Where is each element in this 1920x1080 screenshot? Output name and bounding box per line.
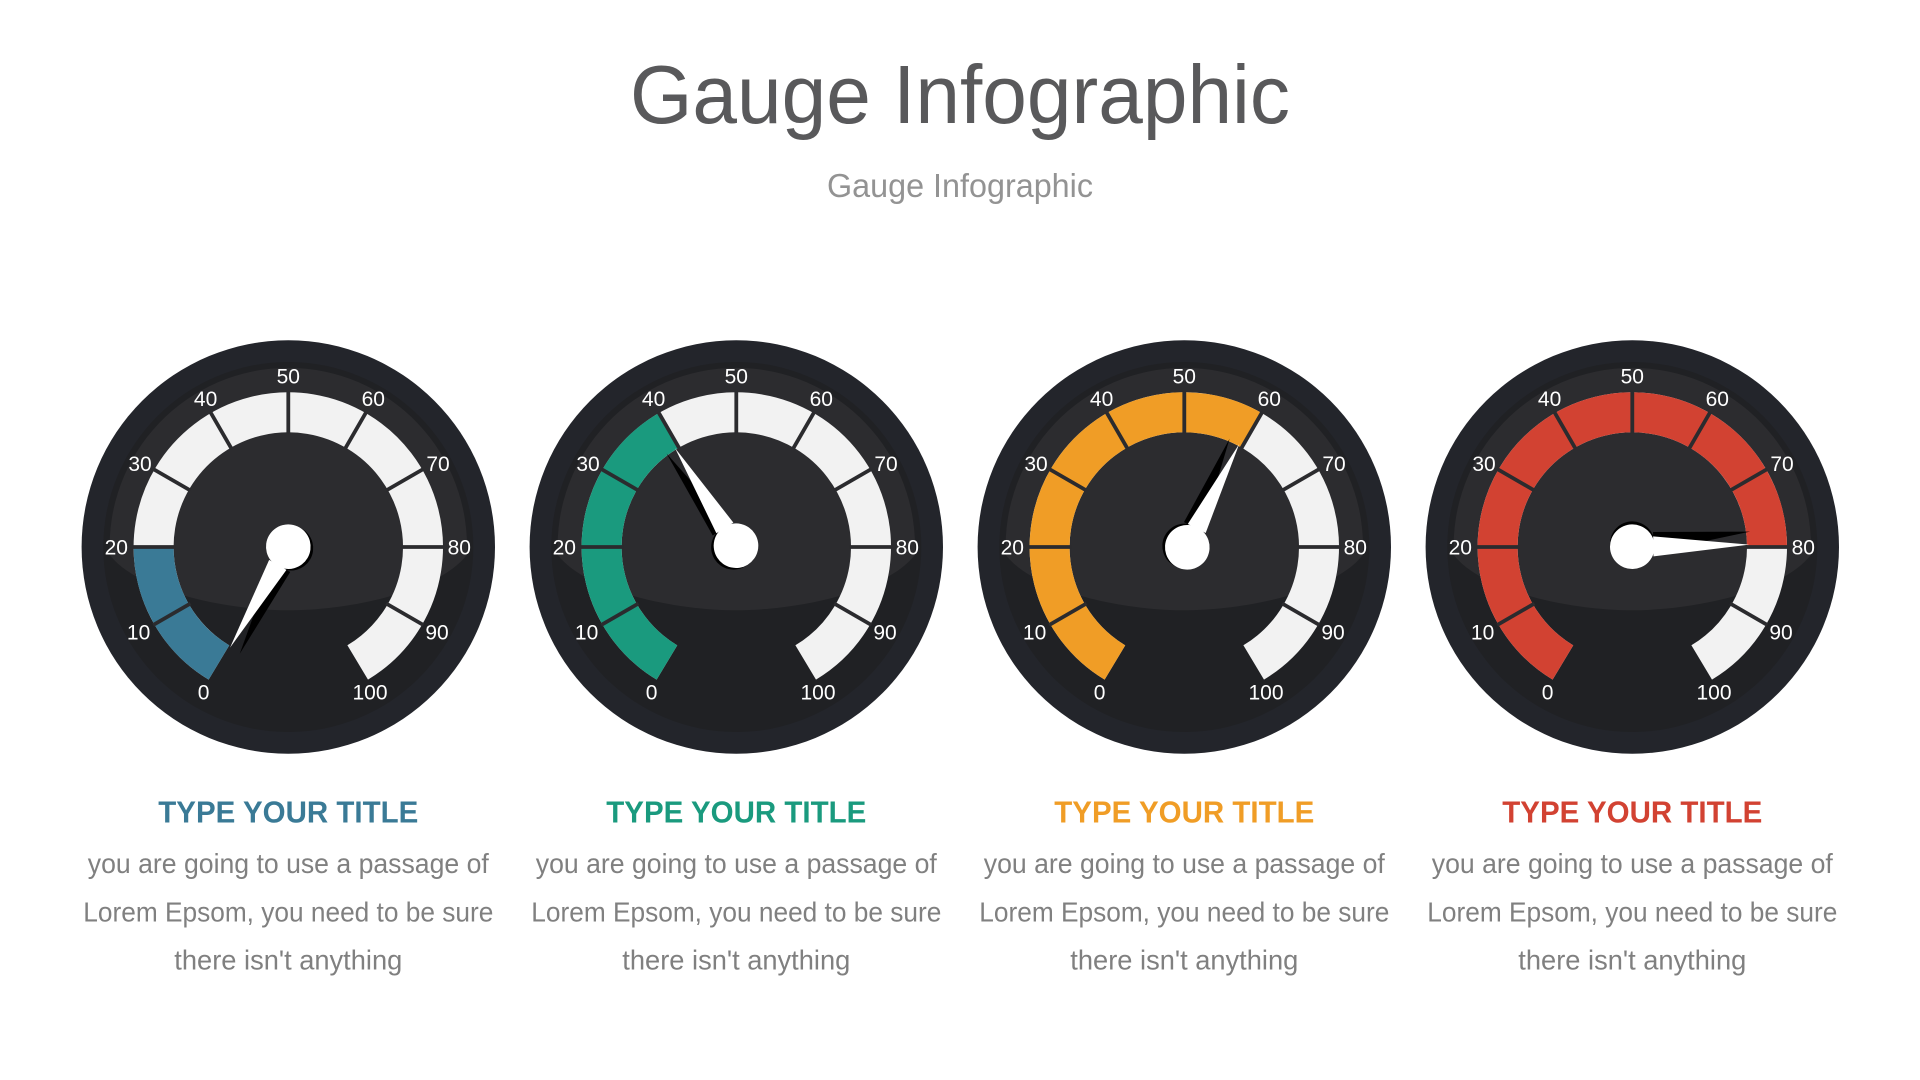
gauge dial 3: 0 <box>1094 682 1105 704</box>
gauge dial 1: 60 <box>362 388 385 411</box>
gauge dial 2: 60 <box>810 388 833 411</box>
gauge dial 2: 90 <box>873 622 897 644</box>
gauge dial 4: 20 <box>1449 536 1472 560</box>
gauge dial 3: 30 <box>1024 453 1048 476</box>
gauge dial 3: 90 <box>1321 622 1345 644</box>
gauge dial 2: 20 <box>553 536 576 560</box>
gauge title 4: TYPE YOUR TITLE <box>1502 794 1762 830</box>
gauge dial 1: 80 <box>448 536 471 560</box>
gauge dial 1: 50 <box>277 366 300 388</box>
gauge dial 1: 30 <box>128 453 152 476</box>
gauge dial 4 <box>1426 340 1839 754</box>
gauge dial 1 <box>82 340 495 754</box>
gauge title 3: TYPE YOUR TITLE <box>1054 794 1314 830</box>
needle 1 <box>210 516 321 661</box>
gauge text 1 <box>83 848 493 976</box>
gauge dial 4: 60 <box>1706 388 1729 411</box>
gauge dial 4: 80 <box>1792 536 1815 560</box>
subtitle: Gauge Infographic <box>827 167 1093 204</box>
gauge dial 4: 40 <box>1538 388 1561 411</box>
gauge dial 4: 70 <box>1770 453 1794 476</box>
gauge dial 1: 100 <box>352 682 388 704</box>
gauge dial 4: 10 <box>1471 622 1494 644</box>
gauge dial 3: 80 <box>1344 536 1367 560</box>
gauge dial 1: 20 <box>105 536 128 560</box>
gauge dial 4: 30 <box>1472 453 1496 476</box>
gauge dial 4: 100 <box>1696 682 1732 704</box>
gauge text 3: Lorem Epsom, you need to be sure <box>979 896 1389 928</box>
gauge text 1: there isn't anything <box>174 944 402 976</box>
panel: gauge 2 teal <box>530 340 943 976</box>
gauge dial 3: 20 <box>1001 536 1024 560</box>
gauge text 2: there isn't anything <box>622 944 850 976</box>
gauge dial 2: 30 <box>576 453 600 476</box>
gauge text 3: you are going to use a passage of <box>984 848 1385 879</box>
gauge text 3: there isn't anything <box>1070 944 1298 976</box>
gauge dial 2: 40 <box>642 388 665 411</box>
gauge text 4: Lorem Epsom, you need to be sure <box>1427 896 1837 928</box>
gauge dial 1: 0 <box>198 682 209 704</box>
gauge dial 2: 100 <box>800 682 836 704</box>
panel: gauge 4 red <box>1426 340 1839 976</box>
gauge dial 1: 70 <box>426 453 450 476</box>
gauge dial 2: 10 <box>575 622 598 644</box>
needle 3 <box>1155 432 1259 577</box>
gauge dial 4: 90 <box>1769 622 1793 644</box>
gauge text 2 <box>531 848 941 976</box>
gauge title 1: TYPE YOUR TITLE <box>158 794 418 830</box>
gauge dial 2 <box>530 340 943 754</box>
gauge dial 1: 40 <box>194 388 217 411</box>
gauge dial 2: 50 <box>725 366 748 388</box>
gauge dial 3: 50 <box>1173 366 1196 388</box>
gauge text 1: you are going to use a passage of <box>88 848 489 879</box>
gauge text 1: Lorem Epsom, you need to be sure <box>83 896 493 928</box>
gauge text 4: you are going to use a passage of <box>1432 848 1833 879</box>
gauge title 2: TYPE YOUR TITLE <box>606 794 866 830</box>
gauge dial 3: 10 <box>1023 622 1046 644</box>
gauge dial 3: 60 <box>1258 388 1281 411</box>
gauge dial 3 <box>978 340 1391 754</box>
gauge dial 2: 0 <box>646 682 657 704</box>
title: Gauge Infographic <box>630 48 1290 141</box>
panel: gauge 1 blue <box>82 340 495 976</box>
gauge text 3 <box>979 848 1389 976</box>
gauge dial 3: 70 <box>1322 453 1346 476</box>
panel: gauge 3 orange <box>978 340 1391 976</box>
gauge dial 1: 10 <box>127 622 150 644</box>
gauge text 4 <box>1427 848 1837 976</box>
gauge dial 4: 50 <box>1621 366 1644 388</box>
gauge text 4: there isn't anything <box>1518 944 1746 976</box>
needle 4 <box>1610 519 1751 569</box>
gauge dial 3: 100 <box>1248 682 1284 704</box>
gauge dial 4: 0 <box>1542 682 1553 704</box>
gauge dial 3: 40 <box>1090 388 1113 411</box>
gauge text 2: you are going to use a passage of <box>536 848 937 879</box>
gauge dial 2: 70 <box>874 453 898 476</box>
gauge dial 1: 90 <box>425 622 449 644</box>
gauge text 2: Lorem Epsom, you need to be sure <box>531 896 941 928</box>
gauge dial 2: 80 <box>896 536 919 560</box>
needle 2 <box>654 436 767 578</box>
